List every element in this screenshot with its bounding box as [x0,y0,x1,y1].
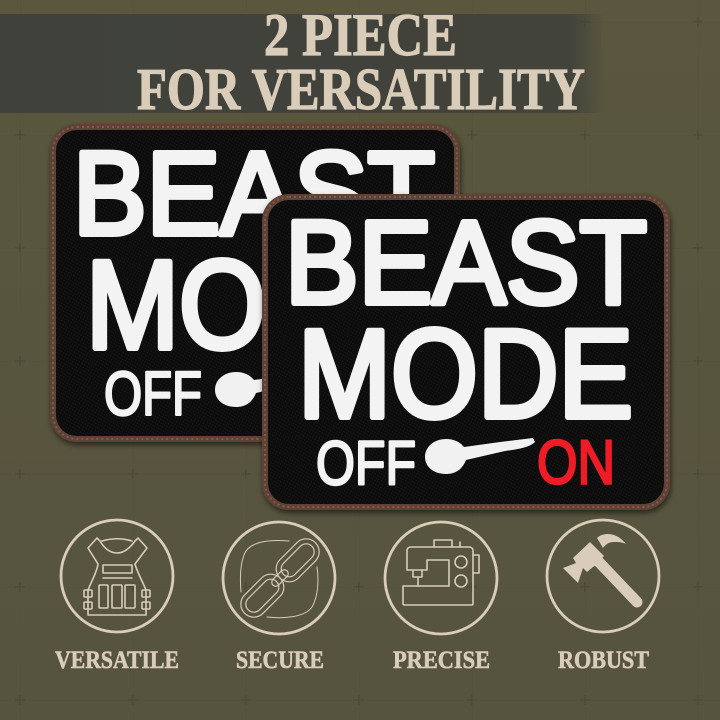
title banner [0,14,605,113]
back patch text: OFF: OFF [104,360,202,429]
front patch text: MODE: MODE [298,305,633,444]
label: versatile: VERSATILE [55,647,179,674]
front patch text: BEAST: BEAST [285,197,647,329]
back patch switch [215,371,325,407]
front patch text: ON: ON [537,428,615,498]
icon: hammer [547,520,659,632]
label: robust: ROBUST [558,647,649,674]
patch: front [265,197,667,507]
back patch text: BEAST: BEAST [73,128,435,260]
front patch switch [425,438,535,474]
icon: sewing machine [385,522,497,634]
icon: vest [61,520,173,632]
title: 2 PIECE [264,2,457,68]
front patch text: OFF: OFF [316,430,416,498]
label: precise: PRECISE [393,647,490,674]
title: FOR VERSATILITY [137,56,585,122]
back patch text: MODE: MODE [86,236,421,375]
icon: chain link [223,522,335,634]
label: secure: SECURE [236,647,324,674]
title [137,2,585,122]
patch: back [53,127,457,439]
